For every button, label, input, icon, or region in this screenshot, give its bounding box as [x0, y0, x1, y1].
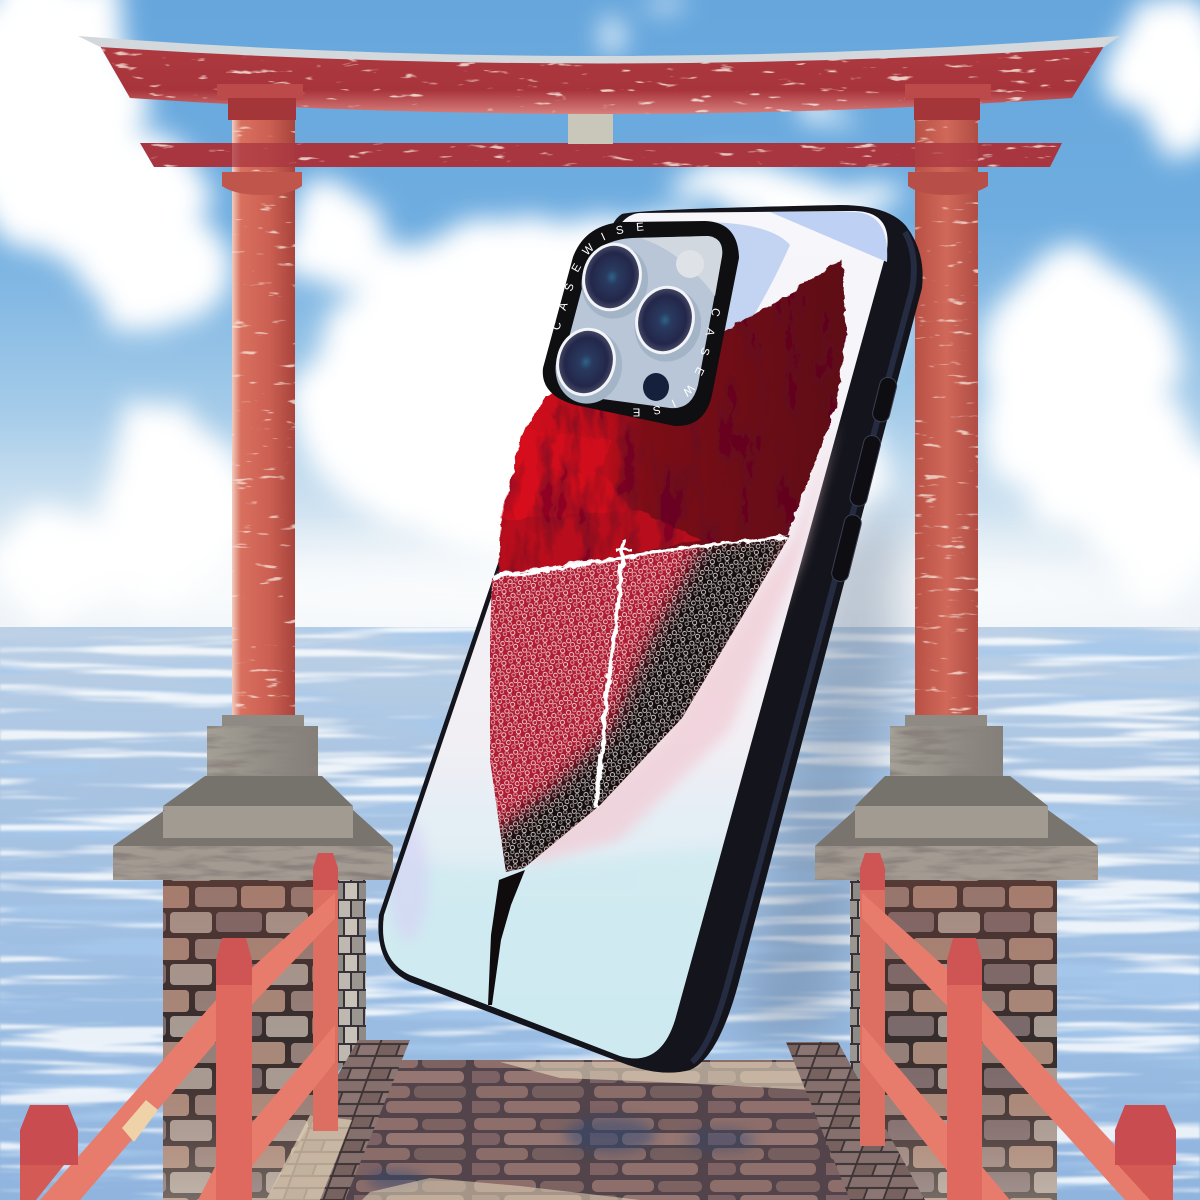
- phone back face: [383, 211, 888, 1058]
- lens middle: [626, 281, 709, 369]
- camera module: [542, 221, 739, 426]
- cobblestone walkway: [266, 1040, 925, 1200]
- pink haze around painting: [530, 420, 838, 865]
- centre strut: [568, 106, 613, 144]
- camera module: CASEWISE: [554, 222, 644, 330]
- white drip cross: [495, 537, 788, 808]
- right pillar: [908, 110, 988, 720]
- red paint upper: [498, 258, 846, 574]
- phone: [378, 205, 923, 1073]
- torii gate: [78, 36, 1120, 720]
- lens top: [573, 238, 656, 326]
- phone body: [378, 205, 923, 1073]
- camera ring: [543, 221, 739, 426]
- brand text left: [556, 225, 690, 330]
- sky background: [0, 0, 1200, 630]
- side buttons: [830, 376, 898, 583]
- right railing: [860, 853, 1176, 1200]
- sea: [0, 627, 1200, 1200]
- flash: [676, 250, 704, 278]
- left railing: [20, 853, 338, 1200]
- clouds: [0, 0, 1200, 635]
- beaded lower paint: [490, 535, 790, 872]
- top beam: [78, 36, 1120, 114]
- right curb: [786, 1042, 925, 1200]
- camera module: CASEWISE: [633, 308, 720, 416]
- sensor: [643, 373, 669, 401]
- left curb: [266, 1040, 410, 1200]
- pillar caps: [217, 84, 991, 120]
- brand text right: [580, 308, 716, 412]
- lower beam: [140, 143, 1062, 167]
- phone shadow haze: [740, 500, 900, 1040]
- right stone base: [815, 715, 1098, 1200]
- aqua and lilac reflections: [383, 822, 723, 1058]
- sky reflection top right: [770, 212, 887, 262]
- black ink drip: [488, 870, 525, 1005]
- left pillar: [222, 110, 302, 720]
- camera plate: [560, 236, 722, 408]
- left stone base: [113, 715, 393, 1200]
- lens lower: [547, 323, 630, 411]
